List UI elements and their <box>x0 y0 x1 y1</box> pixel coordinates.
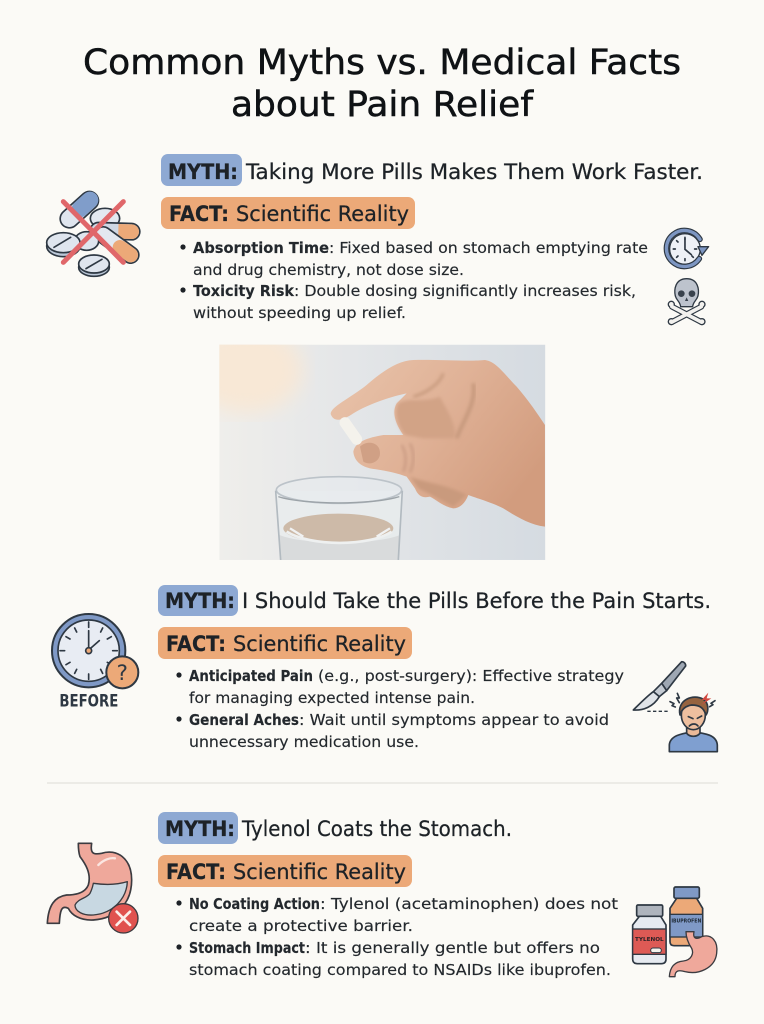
myth 3 badge <box>158 812 238 844</box>
panel: myth 1 <box>47 154 709 325</box>
icon: clock labelled before: ? <box>117 661 128 686</box>
fact 1 bullets <box>180 239 648 322</box>
icon: clock labelled before: BEFORE <box>59 692 118 711</box>
icon: scalpel <box>633 662 686 711</box>
fact 2 bullets <box>176 667 624 751</box>
myth 3 statement: Tylenol Coats the Stomach. <box>241 817 512 841</box>
fact 3 bullets: create a protective barrier. <box>189 917 413 935</box>
fact 3 badge <box>158 855 412 887</box>
icon: clock labelled before <box>52 614 138 711</box>
fact 3 bullets: stomach coating compared to NSAIDs like ibuprofen. <box>189 961 611 979</box>
fact 2 heading: FACT: <box>166 632 226 656</box>
fact 2 bullets: : Wait until symptoms appear to avoid <box>299 711 609 729</box>
icon: person in pain <box>669 693 717 752</box>
fact 2 heading: Scientific Reality <box>233 632 406 656</box>
title: about Pain Relief <box>231 85 534 125</box>
icon: ibuprofen bottle: IBUPROFEN <box>671 918 701 924</box>
capsule <box>345 423 357 439</box>
fact 1 bullets: without speeding up relief. <box>193 304 406 322</box>
fact 2 badge <box>158 627 412 659</box>
fact 1 heading: Scientific Reality <box>236 202 409 226</box>
title <box>83 43 681 125</box>
icon: tylenol bottle: TYLENOL <box>635 937 664 943</box>
myth 1 statement: Taking More Pills Makes Them Work Faster. <box>245 160 703 184</box>
myth 2 statement: I Should Take the Pills Before the Pain Starts. <box>242 589 711 613</box>
icon: skull and crossbones <box>668 279 705 325</box>
fact 3 bullets: No Coating Action <box>189 895 320 913</box>
icon: clock with arrow <box>666 230 709 266</box>
icon: tylenol bottle <box>633 905 666 964</box>
fact 2 bullets: Anticipated Pain <box>189 667 313 685</box>
photo: hand holding capsule over a glass of water <box>219 344 546 560</box>
fact 1 bullets: Toxicity Risk <box>193 282 295 300</box>
title: Common Myths vs. Medical Facts <box>83 43 681 83</box>
icon: crossed-out pills <box>47 200 139 276</box>
myth 3 label: MYTH: <box>165 817 235 841</box>
myth 2 label: MYTH: <box>165 589 235 613</box>
fact 3 bullets: : It is generally gentle but offers no <box>305 939 600 957</box>
myth 1 label: MYTH: <box>168 160 238 184</box>
divider <box>47 782 718 784</box>
icon: small stomach <box>669 932 717 977</box>
panel: myth 3 <box>47 812 717 979</box>
fact 1 bullets: and drug chemistry, not dose size. <box>193 261 464 279</box>
fact 3 heading: Scientific Reality <box>233 860 406 884</box>
fact 1 badge <box>161 197 415 229</box>
fact 1 bullets: Absorption Time <box>193 239 329 257</box>
fact 3 bullets: : Tylenol (acetaminophen) does not <box>320 895 618 913</box>
myth 2 badge <box>158 585 238 616</box>
fact 1 bullets: : Fixed based on stomach emptying rate <box>329 239 648 257</box>
glass of water <box>276 477 402 560</box>
fact 2 bullets: unnecessary medication use. <box>189 733 419 751</box>
fact 2 bullets: General Aches <box>189 711 299 729</box>
fact 3 heading: FACT: <box>166 860 226 884</box>
fact 2 bullets: (e.g., post-surgery): Effective strategy <box>318 667 624 685</box>
myth 1 badge <box>161 154 242 186</box>
fact 1 heading: FACT: <box>169 202 229 226</box>
fact 1 bullets: : Double dosing significantly increases risk, <box>294 282 636 300</box>
icon: ibuprofen bottle <box>670 887 703 946</box>
fact 2 bullets: for managing expected intense pain. <box>189 689 475 707</box>
icon: stomach with red cross <box>47 843 138 933</box>
panel: myth 2 <box>52 585 717 752</box>
fact 3 bullets <box>176 895 618 979</box>
fact 3 bullets: Stomach Impact <box>189 939 305 957</box>
hand <box>331 360 545 527</box>
